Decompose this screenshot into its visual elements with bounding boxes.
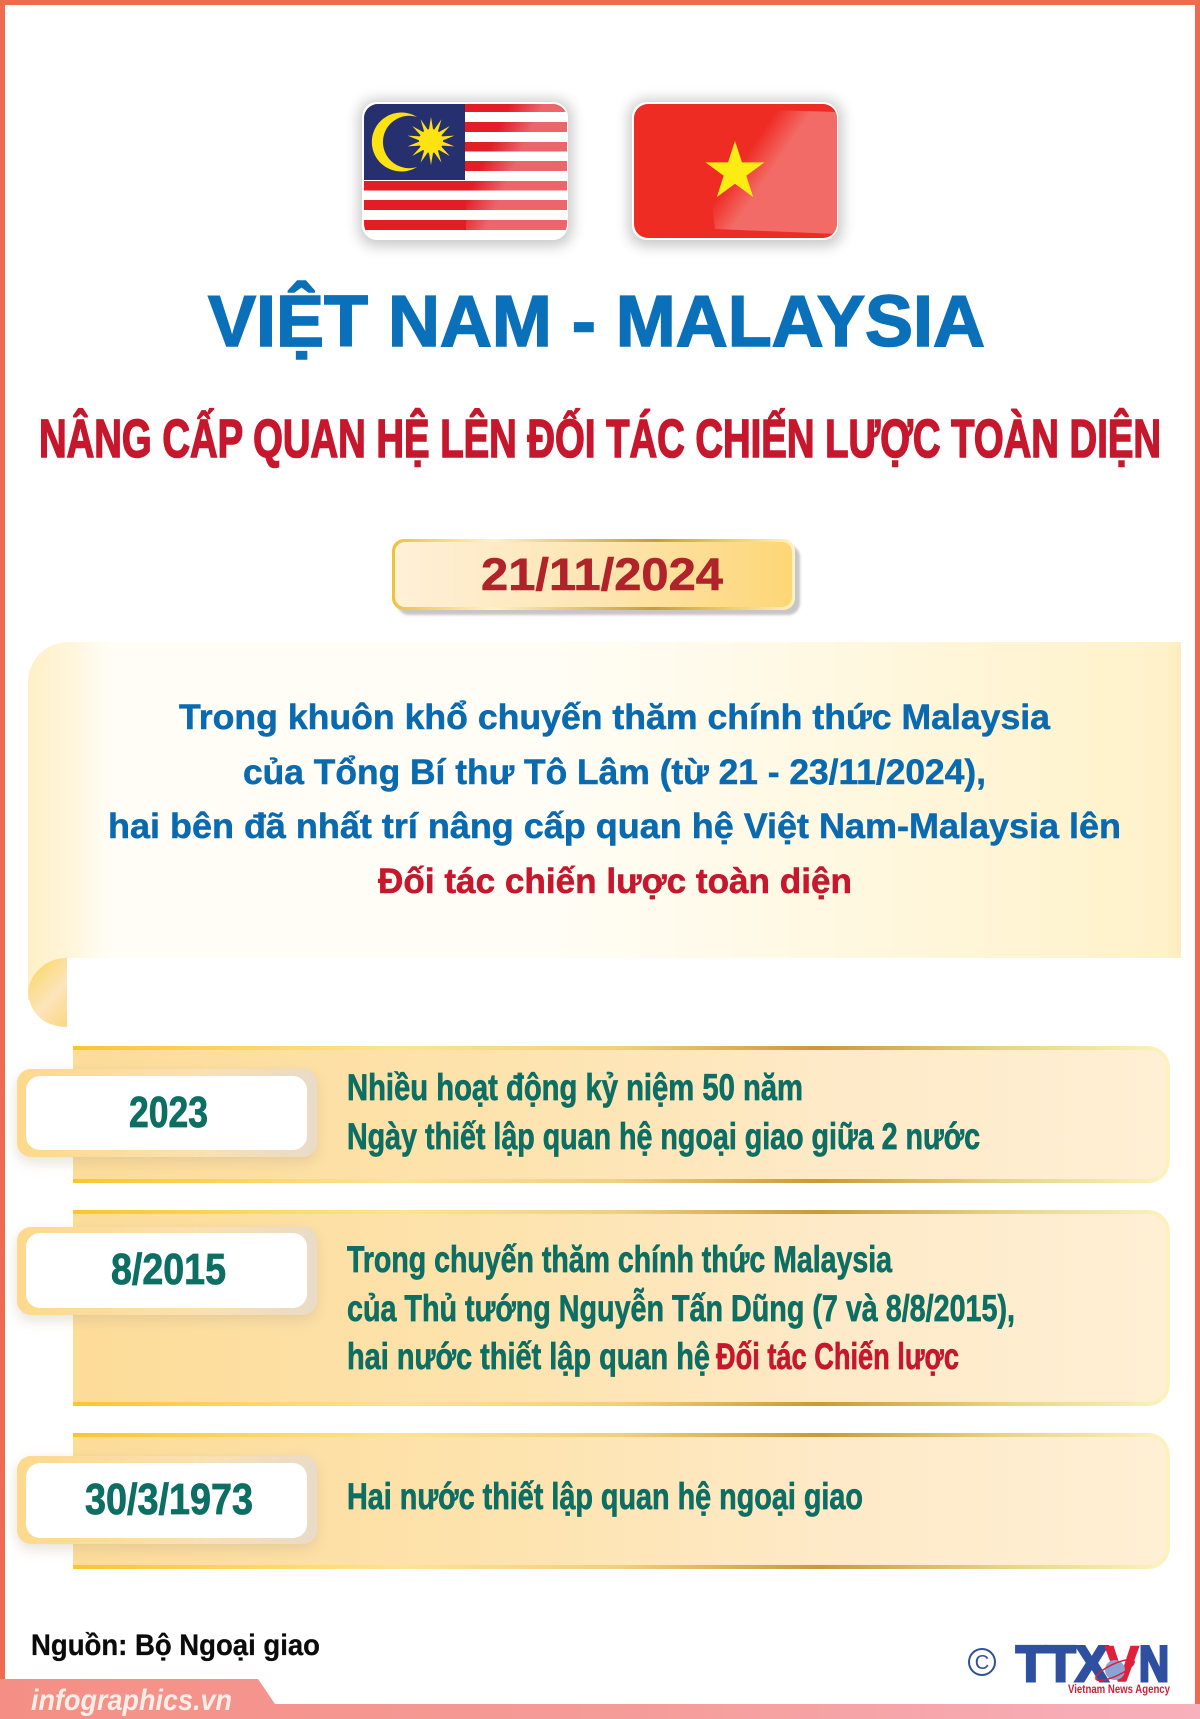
intro text: Trong khuôn khổ chuyến thăm chính thức Malaysia: [179, 698, 1051, 737]
2023 text: [347, 1067, 980, 1157]
8/2015 text: Đối tác Chiến lược: [716, 1336, 959, 1377]
icon: copyright: C: [975, 1652, 989, 1674]
logo: TTXVN: [1016, 1636, 1171, 1696]
8/2015 text: Trong chuyến thăm chính thức Malaysia: [347, 1239, 892, 1280]
panel: introduction scroll: [28, 642, 1181, 1027]
intro text: [108, 698, 1121, 901]
year tab 2023: 2023: [129, 1088, 208, 1137]
source: Nguồn: Bộ Ngoại giao: [31, 1629, 320, 1662]
date badge: 21/11/2024: [481, 549, 723, 600]
year tab 8/2015: [17, 1227, 317, 1320]
year tab 8/2015: 8/2015: [111, 1245, 226, 1294]
year tab 30/3/1973: [17, 1456, 317, 1549]
2023 text: Ngày thiết lập quan hệ ngoại giao giữa 2 nước: [347, 1116, 980, 1157]
8/2015 text: của Thủ tướng Nguyễn Tấn Dũng (7 và 8/8/2015),: [347, 1288, 1015, 1329]
1973 text: Hai nước thiết lập quan hệ ngoại giao: [347, 1476, 863, 1517]
logo: TTXVN: TTX: [1016, 1636, 1108, 1692]
panel: 30/3/1973 row: [17, 1433, 1170, 1569]
intro text: Đối tác chiến lược toàn diện: [378, 862, 852, 901]
logo: TTXVN: V: [1105, 1636, 1140, 1692]
intro text: hai bên đã nhất trí nâng cấp quan hệ Việt Nam-Malaysia lên: [108, 807, 1121, 846]
scroll curl: [28, 958, 67, 1027]
logo: TTXVN: Vietnam News Agency: [1068, 1684, 1171, 1696]
2023 text: Nhiều hoạt động kỷ niệm 50 năm: [347, 1067, 803, 1108]
date badge: [392, 539, 800, 615]
year tab 2023: [17, 1069, 317, 1162]
year tab 30/3/1973: 30/3/1973: [85, 1475, 253, 1524]
icon: Malaysia flag: [359, 100, 572, 246]
footer band: [0, 1679, 1200, 1719]
intro text: của Tổng Bí thư Tô Lâm (từ 21 - 23/11/2024),: [243, 753, 986, 792]
8/2015 text: hai nước thiết lập quan hệ: [347, 1336, 710, 1377]
panel: 8/2015 row: [17, 1210, 1170, 1406]
8/2015 text: [347, 1239, 1015, 1377]
website: infographics.vn: [31, 1684, 232, 1717]
logo: TTXVN: N: [1139, 1636, 1169, 1692]
icon: Vietnam flag: [629, 100, 842, 246]
title: VIỆT NAM - MALAYSIA: [208, 281, 985, 362]
icon: copyright: [969, 1649, 995, 1675]
panel: 2023 row: [17, 1046, 1170, 1183]
